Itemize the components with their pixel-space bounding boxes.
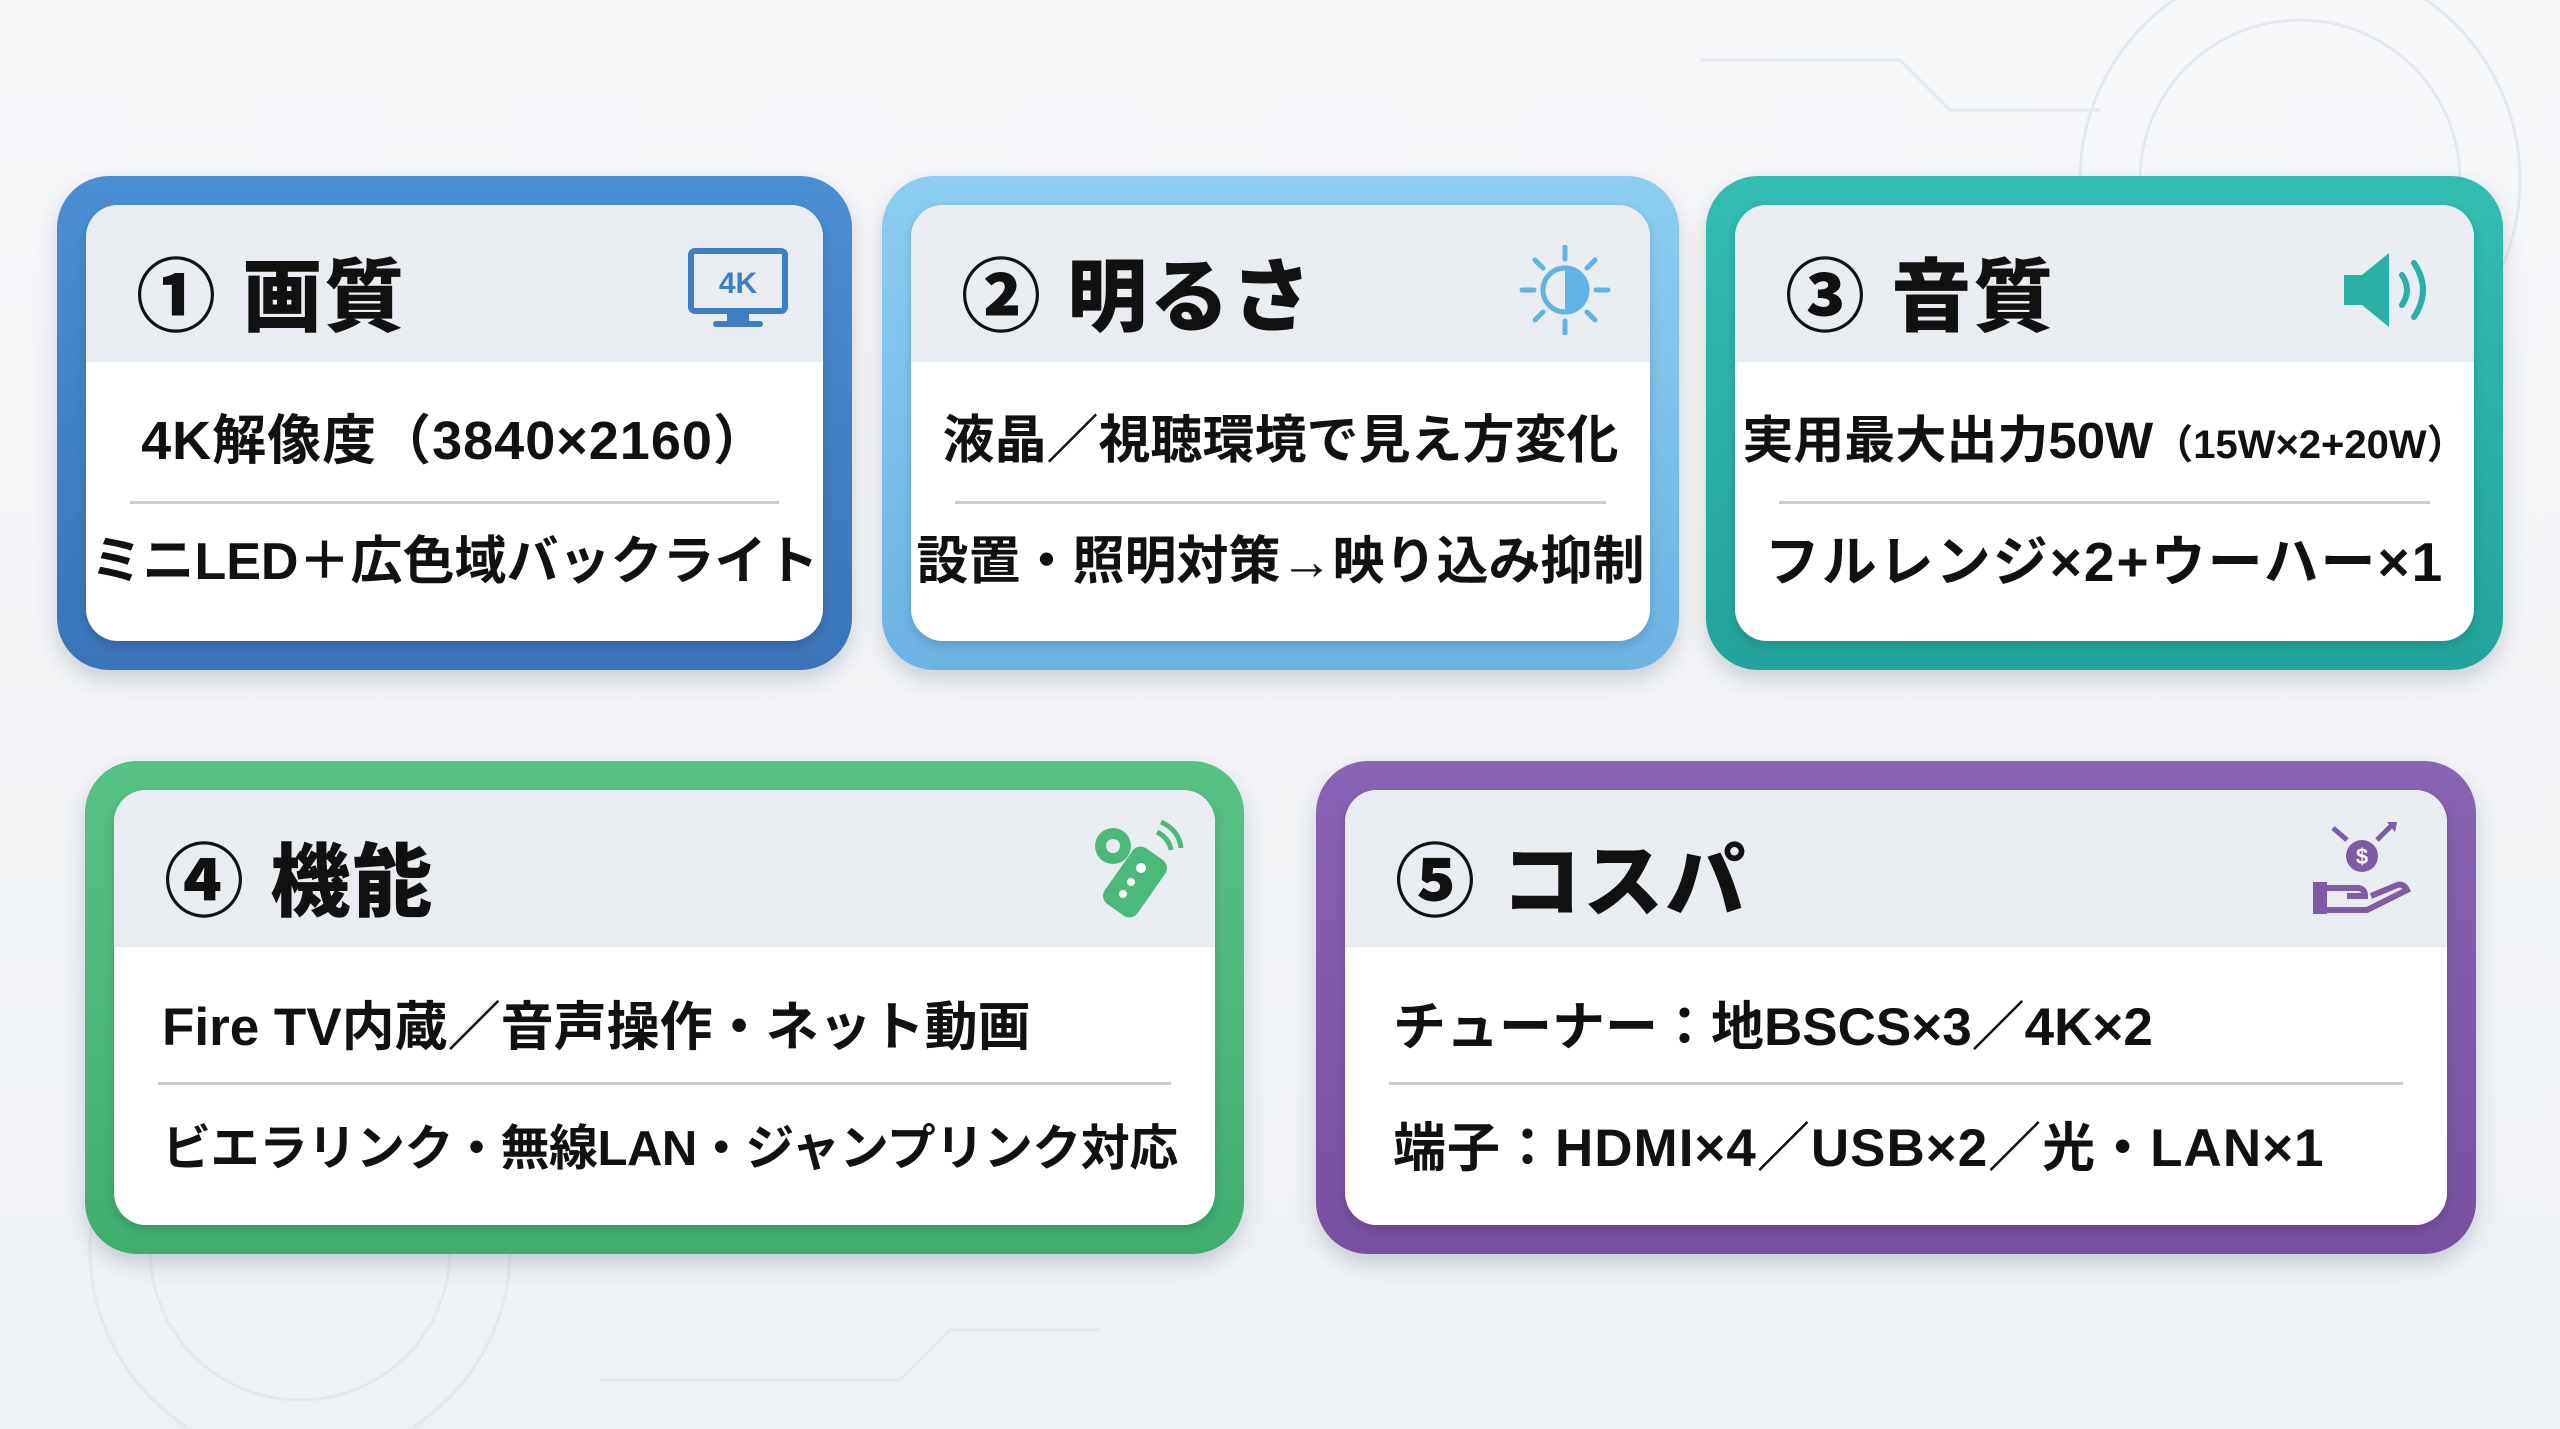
icon: money hand: $ (2356, 844, 2368, 869)
text: row 1: Fire TV内蔵／音声操作・ネット動画 (162, 998, 1031, 1057)
text: row 1: 液晶／視聴環境で見え方変化 (942, 412, 1618, 470)
text: row 2: ビエラリンク・無線LAN・ジャンプリンク対応 (162, 1122, 1178, 1176)
text: row 1: 実用最大出力50W（15W×2+20W） (1742, 412, 2467, 469)
text: row 2: 設置・照明対策→映り込み抑制 (916, 533, 1644, 591)
text: row 2: ミニLED＋広色域バックライト (90, 533, 818, 591)
heading: 音質: ③ 音質 (1785, 253, 2055, 342)
heading: コスパ: ⑤ コスパ (1395, 838, 1747, 927)
heading: 画質: ① 画質 (136, 253, 406, 342)
text: row 2: フルレンジ×2+ウーハー×1 (1765, 531, 2444, 593)
panel: 画質 (57, 176, 852, 670)
text: row 2: 端子：HDMI×4／USB×2／光・LAN×1 (1393, 1119, 2325, 1178)
panel: コスパ (1316, 761, 2476, 1254)
panel: 機能 (85, 761, 1244, 1254)
icon: speaker (2344, 253, 2426, 327)
icon: gear remote (1095, 820, 1184, 918)
icon: money hand (2313, 822, 2411, 914)
panel: 音質 (1706, 176, 2503, 670)
text: row 1: 4K解像度（3840×2160） (141, 411, 768, 471)
panel: 明るさ (882, 176, 1679, 670)
heading: 機能: ④ 機能 (164, 838, 434, 927)
text: row 1: チューナー：地BSCS×3／4K×2 (1393, 998, 2153, 1057)
icon: sun (1520, 245, 1610, 335)
icon: 4K monitor: 4K (719, 267, 758, 300)
heading: 明るさ: ② 明るさ (961, 253, 1313, 342)
icon: 4K monitor (688, 248, 788, 327)
